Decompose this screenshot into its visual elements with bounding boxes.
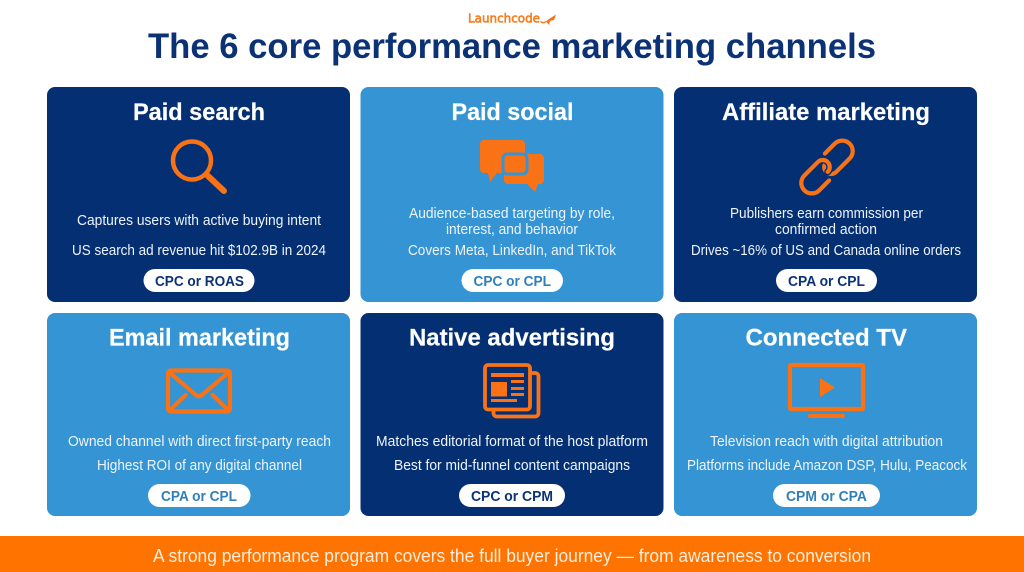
panel: Connected TV bbox=[674, 313, 977, 516]
heading: Affiliate marketing: Affiliate marketing bbox=[722, 99, 930, 126]
footer banner bbox=[0, 536, 1024, 572]
icon: chat bubbles bbox=[480, 140, 544, 192]
icon: newspaper bbox=[485, 365, 538, 417]
text: CTV platforms: Platforms include Amazon DSP, Hulu, Peacock bbox=[687, 458, 968, 474]
text: Affiliate description: confirmed action bbox=[775, 222, 877, 238]
text: Native use case: Best for mid-funnel content campaigns bbox=[394, 458, 630, 474]
text: Paid social description bbox=[409, 206, 615, 238]
icon: magnifying glass bbox=[173, 142, 224, 191]
pill: CPC or CPM: CPC or CPM bbox=[471, 489, 553, 505]
pill: CPC or CPL bbox=[462, 269, 563, 292]
heading: Email marketing: Email marketing bbox=[109, 324, 290, 352]
text: Paid social description: Audience-based targeting by role, bbox=[409, 206, 615, 222]
text: Email description: Owned channel with direct first-party reach bbox=[68, 434, 331, 450]
text: Paid social platforms: Covers Meta, LinkedIn, and TikTok bbox=[408, 243, 617, 259]
pill: CPA or CPL: CPA or CPL bbox=[161, 489, 237, 505]
logo: Launchcode: Launchcode bbox=[468, 12, 540, 26]
heading: Paid search: Paid search bbox=[133, 99, 265, 126]
text: Paid social description: interest, and behavior bbox=[446, 222, 578, 238]
pill: CPC or ROAS: CPC or ROAS bbox=[155, 274, 244, 290]
title: The 6 core performance marketing channels bbox=[148, 27, 876, 66]
pill: CPM or CPA bbox=[773, 484, 880, 507]
pill: CPA or CPL bbox=[776, 269, 877, 292]
pill: CPC or ROAS bbox=[144, 269, 254, 292]
text: Affiliate description: Publishers earn commission per bbox=[730, 206, 923, 222]
text: Affiliate description bbox=[730, 206, 923, 238]
panel: Affiliate marketing bbox=[674, 87, 977, 302]
icon: television with play button bbox=[790, 365, 863, 418]
pill: CPC or CPL: CPC or CPL bbox=[474, 274, 551, 290]
footer banner: A strong performance program covers the full buyer journey — from awareness to conversion bbox=[153, 546, 871, 566]
text: Affiliate stat: Drives ~16% of US and Canada online orders bbox=[691, 243, 961, 259]
panel: Paid social bbox=[360, 87, 664, 302]
heading: Connected TV: Connected TV bbox=[746, 324, 908, 352]
panel: Paid search bbox=[47, 87, 350, 302]
pill: CPC or CPM bbox=[459, 484, 565, 507]
pill: CPA or CPL bbox=[148, 484, 250, 507]
text: Native description: Matches editorial format of the host platform bbox=[376, 434, 648, 450]
heading: Paid social: Paid social bbox=[452, 99, 574, 126]
panel: Native advertising bbox=[360, 313, 664, 516]
icon: envelope bbox=[168, 370, 230, 412]
text: CTV description: Television reach with digital attribution bbox=[710, 434, 943, 450]
pill: CPA or CPL: CPA or CPL bbox=[788, 274, 865, 290]
text: Email stat: Highest ROI of any digital channel bbox=[97, 458, 302, 474]
panel: Email marketing bbox=[47, 313, 350, 516]
text: Paid search stat: US search ad revenue hit $102.9B in 2024 bbox=[72, 243, 326, 259]
text: Paid search description: Captures users with active buying intent bbox=[77, 213, 321, 229]
icon: chain link bbox=[796, 136, 858, 198]
heading: Native advertising: Native advertising bbox=[409, 324, 615, 352]
pill: CPM or CPA: CPM or CPA bbox=[786, 489, 867, 505]
